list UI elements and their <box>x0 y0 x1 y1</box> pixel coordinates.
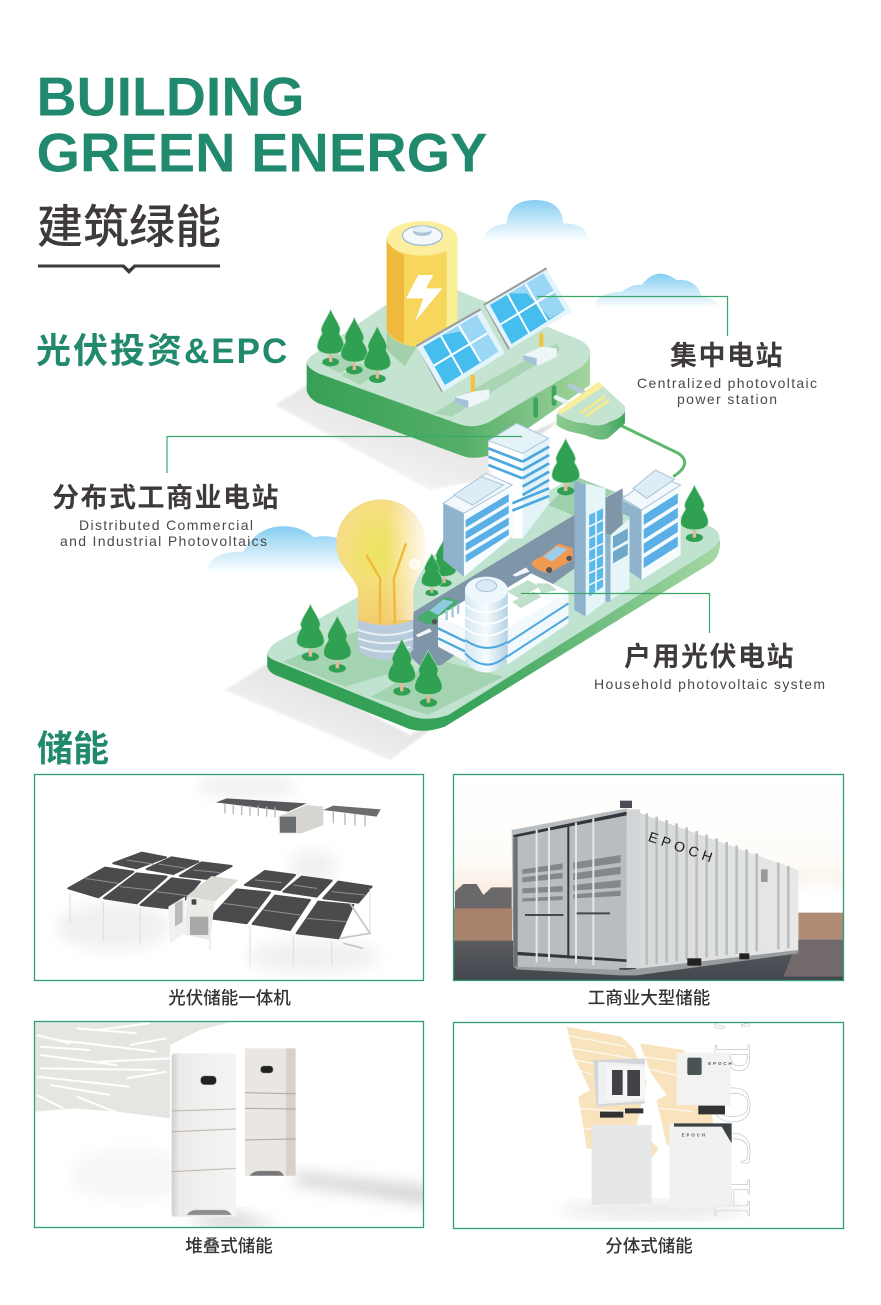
trees <box>317 309 391 383</box>
watermark: serif letters: C <box>703 1131 763 1167</box>
container <box>512 801 798 976</box>
large unit <box>68 853 372 938</box>
icon: plug <box>556 382 625 440</box>
solar panel: rear <box>483 267 572 366</box>
building: left block <box>443 473 512 577</box>
watermark: serif letters: P <box>703 1043 763 1073</box>
battery cabinet: left <box>592 1125 652 1205</box>
caption: 工商业大型储能 <box>588 988 710 1008</box>
floor shadows <box>225 383 560 760</box>
trees: front <box>297 604 442 707</box>
floor shadows <box>193 1168 423 1227</box>
container <box>168 876 238 943</box>
watermark: serif letters: O <box>703 1086 763 1124</box>
callout: distributed station: 分布式工商业电站 <box>52 483 280 513</box>
card border <box>34 1022 424 1228</box>
lower platform <box>267 423 720 731</box>
watermark: serif letters: E <box>703 998 763 1031</box>
battery cabinet: right: EPOCH <box>682 1132 707 1137</box>
inverter: right <box>677 1053 734 1114</box>
panel: stacked storage <box>34 1022 430 1256</box>
cable <box>620 425 685 477</box>
logo: EPOCH on container: EPOCH <box>646 828 715 865</box>
palm leaf <box>35 1022 230 1118</box>
title <box>36 66 488 184</box>
caption: 光伏储能一体机 <box>168 988 291 1008</box>
soft background leaves <box>57 775 380 973</box>
building: low round front <box>438 573 568 673</box>
solar panel: front <box>416 308 505 408</box>
logo text: EPOCH <box>708 1061 734 1066</box>
car: orange <box>531 543 573 573</box>
subtitle: 建筑绿能 <box>37 201 221 253</box>
heading: PV investment and EPC: 光伏投资&EPC <box>36 332 289 371</box>
peach logo shapes <box>567 1027 713 1157</box>
small battery stack <box>245 1048 296 1176</box>
caption: 分体式储能 <box>605 1236 693 1256</box>
illustration: energy scene <box>207 200 720 760</box>
upper platform <box>307 221 685 477</box>
cloud: lower left <box>207 526 345 573</box>
inverter: left <box>593 1058 645 1118</box>
callout: distributed station: Distributed Commercial <box>79 517 253 533</box>
panel: industrial large storage <box>450 770 857 1008</box>
callout: centralized station: Centralized photovoltaic <box>637 375 817 391</box>
card border <box>34 774 424 980</box>
callout: household system: Household photovoltaic system <box>594 676 825 692</box>
callout: centralized station <box>537 296 817 407</box>
trees: back <box>421 438 708 596</box>
building: rear tower <box>488 423 549 538</box>
battery <box>387 221 458 347</box>
building: right block <box>622 470 681 580</box>
callout: household system: 户用光伏电站 <box>624 642 795 672</box>
callout: centralized station: power station <box>677 391 777 407</box>
watermark: serif letters: H <box>703 1178 763 1217</box>
small unit <box>216 798 381 833</box>
floor shadow <box>560 1203 747 1217</box>
panel: PV storage all-in-one <box>34 774 424 1008</box>
road <box>407 488 623 667</box>
card border <box>454 1022 844 1228</box>
icon: lightning bolt <box>406 275 442 321</box>
heading: energy storage: 储能 <box>37 728 109 769</box>
panel: split storage <box>454 998 844 1256</box>
callout: distributed station <box>52 436 522 549</box>
icon: light bulb <box>336 499 431 660</box>
building: tall narrow <box>574 480 630 617</box>
caption: 堆叠式储能 <box>185 1236 273 1256</box>
callout: household system <box>521 594 825 692</box>
title: BUILDING <box>36 66 304 128</box>
clouds <box>483 200 718 308</box>
battery cabinet: right <box>669 1123 732 1208</box>
callout: centralized station: 集中电站 <box>670 341 784 371</box>
callout: distributed station: and Industrial Photovoltaics <box>60 533 267 549</box>
large battery stack <box>172 1053 236 1217</box>
title: GREEN ENERGY <box>36 122 488 184</box>
car: green <box>417 597 459 625</box>
watermark: serif letters <box>714 1023 750 1216</box>
card border <box>454 774 844 980</box>
